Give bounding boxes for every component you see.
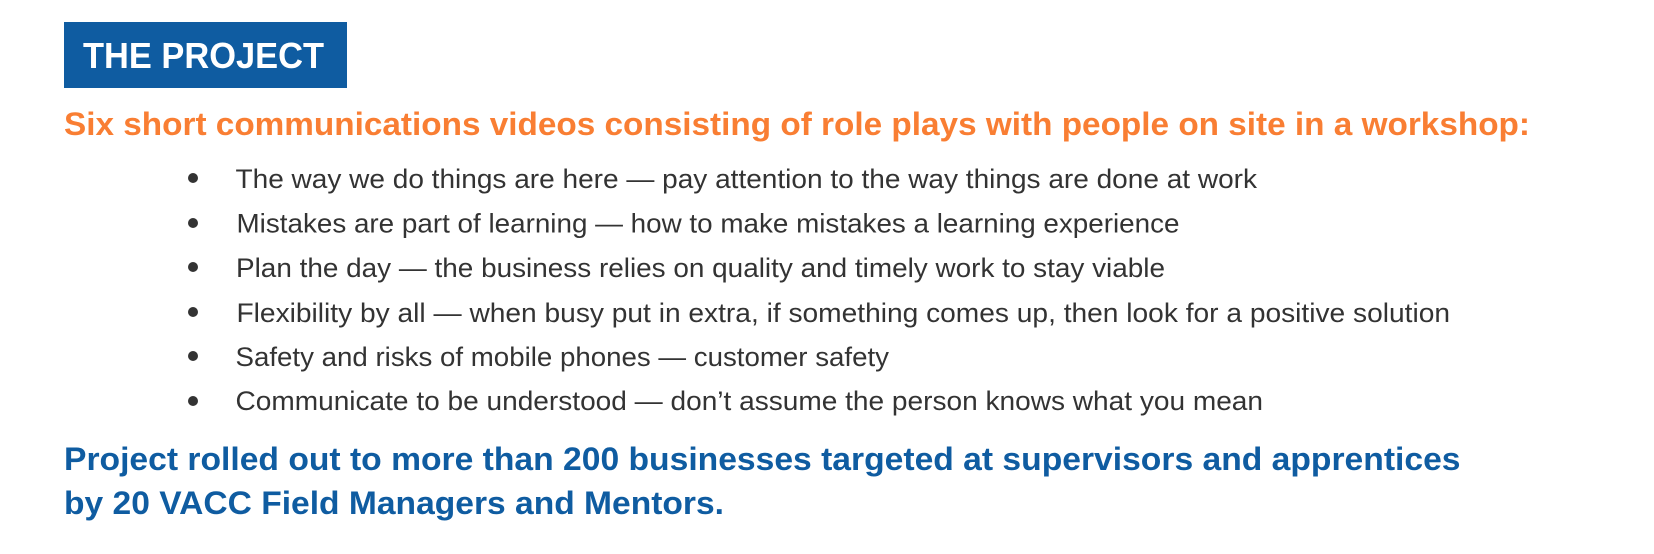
title badge: THE PROJECT: THE PROJECT [83,35,324,76]
title badge: THE PROJECT [64,22,347,88]
bullet item 5: Safety and risks of mobile phones — customer safety [236,342,890,372]
blue closing statement: Project rolled out to more than 200 businesses targeted at supervisors and apprentices [64,441,1460,477]
bullet item 6: Communicate to be understood — don’t assume the person knows what you mean [236,386,1263,416]
bullet item 3: Plan the day — the business relies on quality and timely work to stay viable [236,253,1165,283]
blue closing statement [64,441,1460,521]
blue closing statement: by 20 VACC Field Managers and Mentors. [64,485,724,521]
bullet item 4: Flexibility by all — when busy put in extra, if something comes up, then look for a positive solution [236,298,1450,328]
bullet item 2: Mistakes are part of learning — how to make mistakes a learning experience [236,208,1180,238]
bullet item 1: The way we do things are here — pay attention to the way things are done at work [236,164,1258,194]
bullet list of six videos [188,164,1450,416]
orange heading: Six short communications videos consisting of role plays with people on site in a workshop: [64,106,1530,142]
